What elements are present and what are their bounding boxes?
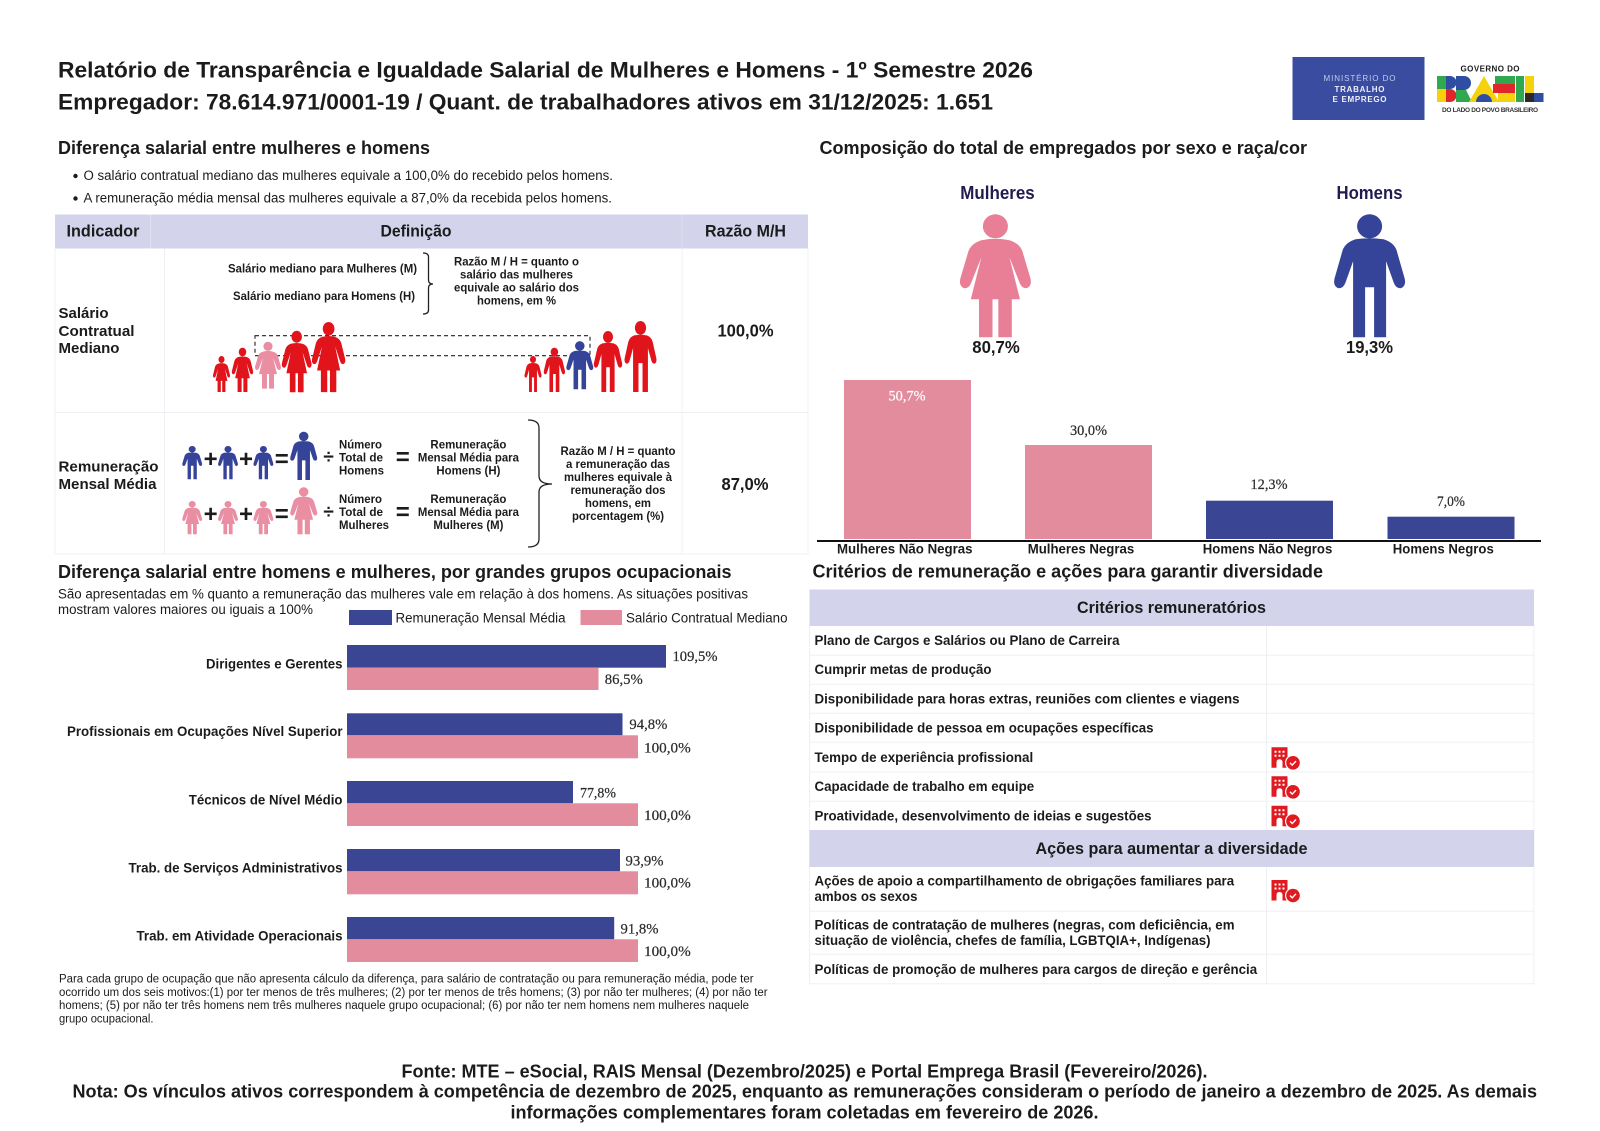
formula text women (339, 494, 519, 532)
bar chart: occupational groups (67, 645, 718, 962)
bar chart: sex and race composition: Homens Não Negros (1203, 541, 1332, 556)
action rows: Ações de apoio a compartilhamento de obrigações familiares para (814, 874, 1235, 889)
formula text men: Mensal Média para (418, 452, 519, 464)
definition note: homens, em (585, 498, 651, 510)
icon: women formula: ÷ (323, 502, 334, 523)
formula text women: Mulheres (339, 520, 389, 532)
footnote: missing calculation reasons: Para cada grupo de ocupação que não apresenta cálculo da diferença, para salário de contratação ou para remuneração média, pode ter (59, 974, 754, 986)
footnote: missing calculation reasons: grupo ocupacional. (59, 1013, 154, 1025)
footer: source and note: Fonte: MTE – eSocial, RAIS Mensal (Dezembro/2025) e Portal Emprega Brasil (Fevereiro/2026). (402, 1062, 1208, 1082)
summary bullets (73, 168, 613, 206)
icon: men formula: + (239, 446, 253, 473)
definition note: a remuneração das (566, 459, 670, 471)
formula text women: Mulheres (M) (433, 520, 504, 532)
bar chart: sex and race composition: 30,0% (1070, 423, 1107, 439)
bar chart: sex and race composition: 7,0% (1437, 494, 1465, 510)
icon: man (1334, 214, 1405, 337)
criteria rows: Plano de Cargos e Salários ou Plano de Carreira (814, 633, 1120, 648)
formula text men: Homens (339, 465, 384, 477)
footnote: missing calculation reasons: homens; (5) por não ter três homens nem três mulheres naquele grupo ocupacional; (6) por não ter nem homens nem mulheres naquele (59, 1000, 749, 1012)
definition note: remuneração dos (570, 485, 666, 497)
panel: men share: 19,3% (1346, 337, 1393, 357)
bar chart: sex and race composition (817, 380, 1541, 556)
dashed median box (255, 336, 590, 356)
formula text women: Total de (339, 507, 383, 519)
chart legend (349, 610, 788, 625)
definition note: mulheres equivale à (564, 472, 673, 484)
panel: women share (960, 183, 1035, 357)
panel: men share: Homens (1336, 183, 1402, 203)
group: Profissionais: Profissionais em Ocupações Nível Superior (67, 724, 343, 739)
heading: salary difference: Diferença salarial entre mulheres e homens (58, 138, 430, 158)
logo: Ministério do Trabalho e Emprego: MINISTÉRIO DO (1324, 74, 1396, 83)
group: Serviços Administrativos: 100,0% (644, 876, 691, 892)
action rows (814, 874, 1258, 977)
icon: women formula: + (239, 501, 253, 528)
row: remuneração mensal média: Remuneração (58, 458, 158, 476)
icon: men formula: + (204, 446, 218, 473)
definition note: Razão M / H = quanto o (454, 256, 579, 268)
table header: Razão M/H (705, 222, 786, 240)
bar chart: sex and race composition: 50,7% (888, 388, 926, 404)
bar chart: sex and race composition: Mulheres Não Negras (837, 541, 972, 556)
action rows: Políticas de promoção de mulheres para cargos de direção e gerência (814, 962, 1258, 977)
group: Serviços Administrativos: Trab. de Serviços Administrativos (128, 861, 342, 876)
row: salário contratual mediano: Salário mediano para Homens (H) (233, 291, 415, 303)
brace (528, 420, 552, 547)
logo: Ministério do Trabalho e Emprego: E EMPREGO (1332, 95, 1386, 104)
footer: source and note: Nota: Os vínculos ativos correspondem à competência de dezembro de 2025, enquanto as remunerações consideram o período de janeiro a dezembro de 2025. As demais (72, 1082, 1537, 1102)
group: Serviços Administrativos (128, 849, 691, 894)
row: salário contratual mediano: Mediano (58, 340, 120, 357)
grid lines (810, 626, 1534, 984)
bar chart: sex and race composition: Homens Negros (1393, 541, 1494, 556)
icon: company check, proactivity (1272, 806, 1301, 829)
row: remuneração mensal média: Mensal Média (58, 476, 157, 493)
panel: indicator table (55, 214, 808, 554)
footer: source and note: informações complementares foram coletadas em fevereiro de 2026. (510, 1102, 1098, 1122)
panel: women share: 80,7% (972, 337, 1020, 357)
icon: women formula (182, 487, 334, 534)
group: Dirigentes e Gerentes (206, 645, 718, 690)
formula text men: Remuneração (430, 439, 506, 451)
title (58, 58, 1033, 114)
summary bullets: O salário contratual mediano das mulheres equivale a 100,0% do recebido pelos homens. (84, 168, 613, 183)
icon: men ordered by salary (524, 321, 656, 392)
logo: Governo do Brasil: DO LADO DO POVO BRASILEIRO (1442, 107, 1538, 114)
action rows: Políticas de contratação de mulheres (negras, com deficiência, em (814, 917, 1234, 932)
group: Técnicos: 100,0% (644, 808, 691, 824)
icon: women formula: = (275, 501, 289, 528)
group: Serviços Administrativos: 93,9% (626, 854, 664, 870)
definition note: homens, em % (477, 296, 556, 308)
row: salário contratual mediano (58, 253, 774, 392)
group: Profissionais (67, 713, 691, 758)
footer: source and note (72, 1062, 1537, 1122)
icon: women formula: + (204, 501, 218, 528)
formula text men: Homens (H) (436, 465, 501, 477)
icon: men formula: = (275, 446, 289, 473)
table header: Definição (380, 222, 452, 240)
icon: company check, teamwork (1272, 776, 1301, 800)
icon: women ordered by salary (213, 322, 345, 392)
formula text women: = (396, 499, 410, 526)
heading: occupational groups: Diferença salarial entre homens e mulheres, por grandes grupos ocupacionais (58, 562, 732, 582)
criteria rows: Capacidade de trabalho em equipe (814, 779, 1035, 794)
criteria rows: Tempo de experiência profissional (814, 750, 1033, 765)
formula text men: Total de (339, 452, 383, 464)
header: ações para aumentar a diversidade: Ações para aumentar a diversidade (1036, 840, 1308, 858)
row: salário contratual mediano: Salário (58, 305, 108, 322)
header: critérios remuneratórios: Critérios remuneratórios (1077, 599, 1266, 617)
formula text men (339, 439, 519, 477)
logo: Ministério do Trabalho e Emprego: TRABALHO (1334, 85, 1384, 94)
logo: Ministério do Trabalho e Emprego (1292, 57, 1424, 120)
table header: Indicador (66, 222, 140, 240)
header: critérios remuneratórios (810, 590, 1534, 626)
definition note: salário das mulheres (460, 270, 573, 282)
formula text women: Mensal Média para (418, 507, 519, 519)
formula text men: Número (339, 439, 382, 451)
value: contractual ratio: 100,0% (718, 320, 774, 340)
group: Técnicos: Técnicos de Nível Médio (189, 792, 342, 807)
panel: women share: Mulheres (960, 183, 1035, 203)
definition note: equivale ao salário dos (454, 282, 579, 294)
brace (423, 253, 433, 314)
icon: men formula (182, 432, 334, 480)
action rows: situação de violência, chefes de família, LGBTQIA+, Indígenas) (814, 933, 1210, 948)
panel: men share (1334, 183, 1405, 357)
chart description: São apresentadas em % quanto a remuneração das mulheres vale em relação à dos homens. As situações positivas (58, 586, 748, 601)
criteria rows: Proatividade, desenvolvimento de ideias e sugestões (814, 808, 1152, 823)
logo: Governo do Brasil: GOVERNO DO (1460, 64, 1520, 74)
definition note: Razão M / H = quanto (560, 446, 676, 458)
icon: company check, shared obligations (1272, 880, 1301, 904)
definition note (560, 446, 676, 523)
group: Atividade Operacionais: 100,0% (644, 944, 691, 960)
group: Técnicos: 77,8% (580, 786, 616, 802)
chart description (58, 586, 748, 617)
group: Profissionais: 100,0% (644, 740, 691, 756)
definition note (454, 256, 579, 308)
icon: men formula: ÷ (323, 447, 334, 468)
group: Atividade Operacionais: Trab. em Atividade Operacionais (136, 929, 342, 944)
row: salário contratual mediano: Contratual (58, 323, 134, 340)
summary bullets: A remuneração média mensal das mulheres equivale a 87,0% da recebida pelos homens. (84, 190, 612, 206)
group: Profissionais: 94,8% (629, 717, 667, 733)
row: salário contratual mediano: Salário mediano para Mulheres (M) (228, 264, 417, 276)
bar chart: sex and race composition: Mulheres Negras (1028, 541, 1134, 556)
criteria rows: Disponibilidade de pessoa em ocupações específicas (814, 721, 1154, 736)
formula text women: Número (339, 494, 382, 506)
chart legend: Salário Contratual Mediano (626, 610, 788, 625)
title: Relatório de Transparência e Igualdade Salarial de Mulheres e Homens - 1º Semestre 2026 (58, 58, 1033, 82)
value: average ratio: 87,0% (722, 474, 769, 494)
chart description: mostram valores maiores ou iguais a 100% (58, 602, 313, 617)
definition note: porcentagem (%) (572, 511, 664, 523)
group: Atividade Operacionais: 91,8% (620, 921, 658, 937)
footnote: missing calculation reasons (59, 974, 768, 1025)
panel: criteria table (810, 590, 1534, 984)
formula text men: = (396, 444, 410, 471)
heading: criteria: Critérios de remuneração e ações para garantir diversidade (812, 562, 1323, 582)
group: Técnicos (189, 781, 691, 826)
criteria rows: Disponibilidade para horas extras, reuniões com clientes e viagens (814, 691, 1240, 706)
icon: company check, experience (1272, 747, 1301, 771)
group: Dirigentes e Gerentes: 86,5% (605, 672, 643, 688)
criteria rows (814, 633, 1240, 823)
icon: woman (960, 214, 1031, 337)
action rows: ambos os sexos (814, 889, 918, 904)
table header (55, 214, 808, 248)
heading: composition: Composição do total de empregados por sexo e raça/cor (820, 138, 1307, 158)
bar chart: sex and race composition: 12,3% (1250, 477, 1288, 493)
formula text women: Remuneração (430, 494, 506, 506)
chart legend: Remuneração Mensal Média (396, 610, 566, 625)
criteria rows: Cumprir metas de produção (814, 662, 992, 677)
row: remuneração mensal média (58, 420, 769, 547)
group: Dirigentes e Gerentes: 109,5% (672, 649, 718, 665)
footnote: missing calculation reasons: ocorrido um dos seis motivos:(1) por ter menos de três mulheres; (2) por ter menos de três homens; (3) por não ter mulheres; (4) por não ter (59, 987, 768, 999)
logo: Governo do Brasil (1437, 64, 1544, 114)
title: Empregador: 78.614.971/0001-19 / Quant. de trabalhadores ativos em 31/12/2025: 1.651 (58, 90, 993, 114)
group: Dirigentes e Gerentes: Dirigentes e Gerentes (206, 656, 342, 671)
header: ações para aumentar a diversidade (810, 830, 1534, 867)
group: Atividade Operacionais (136, 917, 691, 962)
